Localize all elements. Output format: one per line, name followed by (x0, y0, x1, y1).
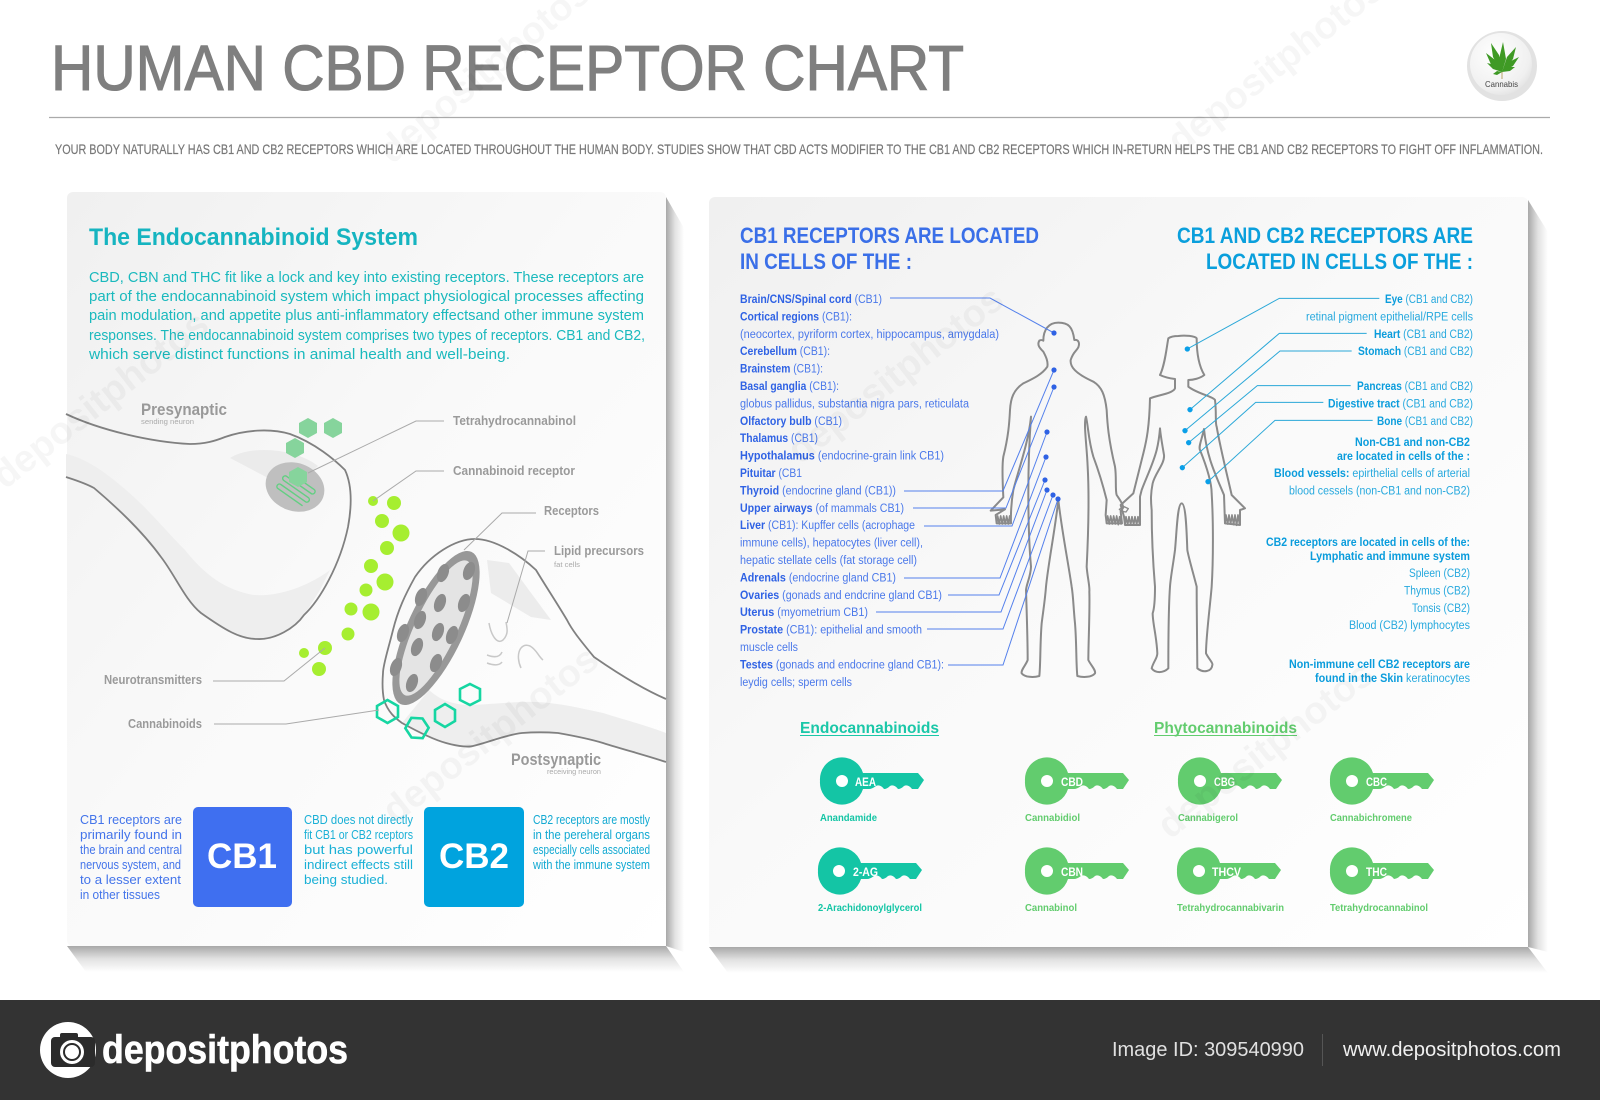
badge: CB1: CB1 (207, 837, 277, 876)
list: cb1 locations: Testes (gonads and endocrine gland CB1): (740, 659, 944, 671)
list: cb1 locations: Hypothalamus (endocrine-grain link CB1) (740, 451, 944, 463)
key: THCV: THCV (1212, 865, 1241, 879)
heading: cb1 and cb2 receptors: CB1 AND CB2 RECEPTORS ARE (1177, 223, 1473, 248)
key: CBN: CBN (1061, 865, 1083, 879)
text block: cbd note (304, 813, 414, 887)
labels: Cannabinoid receptor (453, 463, 575, 478)
badge: CB1 (193, 807, 292, 907)
leader lines: cb1 (876, 298, 1058, 665)
text block: cb1 receptors: to a lesser extent (80, 873, 182, 887)
text block: intro paragraph (88, 269, 645, 363)
text block: intro paragraph: pain modulation, and appetite plus anti-inflammatory effectsand other immune system (89, 307, 644, 324)
list: cb1 locations: Upper airways (of mammals CB1) (740, 503, 904, 515)
list: cb1 and cb2 locations: retinal pigment epithelial/RPE cells (1306, 311, 1473, 323)
image id: Image ID: 309540990 (1112, 1039, 1304, 1061)
list: cb1 and cb2 locations: Non-CB1 and non-CB2 (1355, 437, 1470, 449)
list: cb1 locations: Ovaries (gonads and endcrine gland CB1) (740, 590, 942, 602)
text block: cbd note: but has powerful (304, 843, 413, 857)
heading: cb1 receptors: CB1 RECEPTORS ARE LOCATED (740, 223, 1039, 248)
neurotransmitter dots (299, 496, 410, 676)
list: cb1 locations: globus pallidus, substantia nigra pars, reticulata (740, 398, 970, 410)
text block: cb2 receptors: with the immune system (532, 858, 650, 872)
list: cb1 and cb2 locations: Thymus (CB2) (1404, 585, 1470, 597)
text block: cbd note: CBD does not directly (304, 813, 414, 827)
labels (104, 400, 644, 776)
text block: cb2 receptors: in the pereheral organs (533, 828, 650, 842)
text block: intro paragraph: part of the endocannabinoid system which impact physiological processes affecting (89, 288, 644, 305)
leader lines (213, 421, 545, 724)
thc hexagons (286, 418, 342, 487)
list: cb1 and cb2 locations: Lymphatic and immune system (1310, 551, 1470, 563)
heading: phytocannabinoids: Phytocannabinoids (1154, 720, 1297, 737)
text block: cb2 receptors: CB2 receptors are mostly (533, 813, 651, 827)
labels: Receptors (544, 503, 599, 518)
list: cb1 and cb2 locations: Spleen (CB2) (1409, 568, 1470, 580)
title: HUMAN CBD RECEPTOR CHART (51, 32, 964, 104)
labels: Cannabinoids (128, 716, 202, 731)
panel: receptor locations (709, 197, 1548, 973)
list: cb1 locations: Basal ganglia (CB1): (740, 381, 839, 393)
key: CBG: Cannabigerol (1178, 813, 1238, 824)
icon: cannabis badge: Cannabis (1485, 79, 1518, 89)
vesicle (259, 454, 331, 520)
text block: intro paragraph: responses. The endocannabinoid system comprises two types of receptors. CB1 and CB2, (89, 327, 645, 344)
figure: female body (1121, 336, 1245, 672)
heading: cb1 receptors: IN CELLS OF THE : (740, 249, 912, 274)
key: CBD: Cannabidiol (1025, 813, 1080, 824)
text block: cb1 receptors (80, 813, 182, 902)
key: CBD (1025, 757, 1129, 824)
heading: endocannabinoid system: The Endocannabinoid System (89, 224, 418, 251)
list: cb1 locations: Liver (CB1): Kupffer cells (acrophage (740, 520, 915, 532)
text block: intro paragraph: CBD, CBN and THC fit like a lock and key into existing receptors. These receptors are (89, 269, 644, 286)
list: cb1 and cb2 locations: Tonsis (CB2) (1412, 603, 1470, 615)
labels: fat cells (554, 562, 581, 569)
text block: cb2 receptors (532, 813, 651, 872)
footer logo: depositphotos (102, 1028, 348, 1072)
key: CBN (1025, 847, 1129, 914)
list: cb1 and cb2 locations: Digestive tract (CB1 and CB2) (1328, 398, 1473, 410)
key: THCV: Tetrahydrocannabivarin (1177, 903, 1284, 914)
list: cb1 locations: immune cells), hepatocytes (liver cell), (740, 538, 923, 550)
list: cb1 locations: hepatic stellate cells (fat storage cell) (740, 555, 917, 567)
icon: cannabis badge (1467, 31, 1537, 101)
dots: cb1 (1042, 330, 1061, 502)
list: cb1 and cb2 locations (1266, 294, 1473, 685)
key: CBG: CBG (1214, 775, 1235, 789)
labels: Neurotransmitters (104, 672, 202, 687)
heading: endocannabinoids: Endocannabinoids (800, 720, 939, 737)
labels: Tetrahydrocannabinol (453, 413, 576, 428)
list: cb1 and cb2 locations: Blood (CB2) lymphocytes (1349, 620, 1470, 632)
list: cb1 locations: leydig cells; sperm cells (740, 677, 852, 689)
text block: cb1 receptors: nervous system, and (80, 858, 181, 872)
watermark overlay: depositphotos (1150, 653, 1382, 847)
list: cb1 and cb2 locations: are located in cells of the : (1337, 451, 1470, 463)
text block: cb2 receptors: especially cells associated (533, 843, 650, 857)
badge: CB2: CB2 (439, 837, 509, 876)
labels: sending neuron (141, 419, 194, 426)
key: CBC: CBC (1366, 775, 1387, 789)
text block: cbd note: being studied. (304, 873, 388, 887)
key: THC: Tetrahydrocannabinol (1330, 903, 1428, 914)
key: THCV (1177, 847, 1284, 914)
list: cb1 locations: Brain/CNS/Spinal cord (CB1) (740, 294, 882, 306)
heading: cb1 and cb2 receptors: LOCATED IN CELLS OF THE : (1206, 249, 1473, 274)
key: CBG (1178, 757, 1282, 824)
key: 2-AG (818, 847, 922, 914)
labels: Presynaptic (141, 400, 227, 419)
list: cb1 and cb2 locations: Eye (CB1 and CB2) (1385, 294, 1473, 306)
watermark overlay: depositphotos (375, 638, 607, 832)
list: cb1 locations: Uterus (myometrium CB1) (740, 607, 868, 619)
receptors ellipse (375, 540, 497, 716)
badge: CB2 (424, 807, 524, 907)
key: 2-AG: 2-AG (853, 865, 878, 879)
key: CBN: Cannabinol (1025, 903, 1077, 914)
heading: cb1 and cb2 receptors (1177, 223, 1473, 274)
text block: cb1 receptors: in other tissues (80, 888, 160, 902)
key: AEA: Anandamide (820, 813, 877, 824)
list: cb1 and cb2 locations: blood cessels (non-CB1 and non-CB2) (1289, 485, 1470, 497)
key: THC: THC (1366, 865, 1387, 879)
watermark overlay: depositphotos (780, 278, 1012, 472)
lipid shapes (487, 622, 543, 668)
labels: Lipid precursors (554, 543, 644, 558)
list: cb1 locations (740, 294, 999, 689)
watermark overlay (0, 0, 1392, 847)
text block: cb1 receptors: CB1 receptors are (80, 813, 182, 827)
list: cb1 locations: Adrenals (endocrine gland CB1) (740, 572, 896, 584)
figure: male body (991, 323, 1128, 677)
list: cb1 and cb2 locations: Heart (CB1 and CB2) (1374, 329, 1473, 341)
labels: receiving neuron (547, 769, 601, 776)
list: cb1 locations: Cortical regions (CB1): (740, 311, 852, 323)
list: cb1 locations: muscle cells (740, 642, 798, 654)
footer logo (40, 1022, 348, 1078)
text block: cbd note: indirect effects still (304, 858, 413, 872)
list: cb1 and cb2 locations: Blood vessels: epirthelial cells of arterial (1274, 468, 1470, 480)
website: www.depositphotos.com (1342, 1039, 1561, 1061)
key: CBD: CBD (1061, 775, 1083, 789)
leader lines: cb1 and cb2 (1182, 298, 1379, 482)
cannabinoid hexagons (377, 684, 480, 743)
key: AEA: AEA (855, 775, 876, 789)
text block: cb1 receptors: primarily found in (80, 828, 182, 842)
list: cb1 locations: Brainstem (CB1): (740, 364, 823, 376)
key: THC (1330, 847, 1434, 914)
list: cb1 locations: Prostate (CB1): epithelial and smooth (740, 625, 922, 637)
list: cb1 locations: Thalamus (CB1) (740, 433, 818, 445)
footer bar (0, 1000, 1600, 1100)
list: cb1 locations: Cerebellum (CB1): (740, 346, 830, 358)
dots: cb1 and cb2 (1180, 346, 1211, 484)
key: 2-AG: 2-Arachidonoylglycerol (818, 903, 922, 914)
diagram: synapse (66, 400, 666, 776)
list: cb1 and cb2 locations: Bone (CB1 and CB2) (1377, 416, 1473, 428)
labels: Postsynaptic (511, 750, 601, 769)
key: AEA (820, 757, 924, 824)
list: cb1 locations: (neocortex, pyriform cortex, hippocampus, amygdala) (740, 329, 999, 341)
list: cb1 and cb2 locations: Pancreas (CB1 and CB2) (1357, 381, 1473, 393)
heading: cb1 receptors (740, 223, 1039, 274)
text block: cb1 receptors: the brain and central (80, 843, 182, 857)
list: cb1 and cb2 locations: CB2 receptors are located in cells of the: (1266, 537, 1470, 549)
list: cb1 and cb2 locations: found in the Skin keratinocytes (1315, 673, 1470, 685)
presynaptic neuron (66, 414, 351, 639)
list: cb1 locations: Thyroid (endocrine gland (CB1)) (740, 485, 896, 497)
list: cb1 and cb2 locations: Non-immune cell CB2 receptors are (1289, 659, 1470, 671)
list: cb1 locations: Olfactory bulb (CB1) (740, 416, 842, 428)
postsynaptic neuron (383, 539, 666, 762)
key: CBC: Cannabichromene (1330, 813, 1412, 824)
text block: intro paragraph: which serve distinct functions in animal health and well-being. (88, 346, 510, 363)
key: CBC (1330, 757, 1434, 824)
text block: cbd note: fit CB1 or CB2 rceptors (304, 828, 413, 842)
list: cb1 and cb2 locations: Stomach (CB1 and CB2) (1358, 346, 1473, 358)
list: cb1 locations: Pituitar (CB1 (740, 468, 802, 480)
panel: endocannabinoid system (66, 192, 684, 972)
